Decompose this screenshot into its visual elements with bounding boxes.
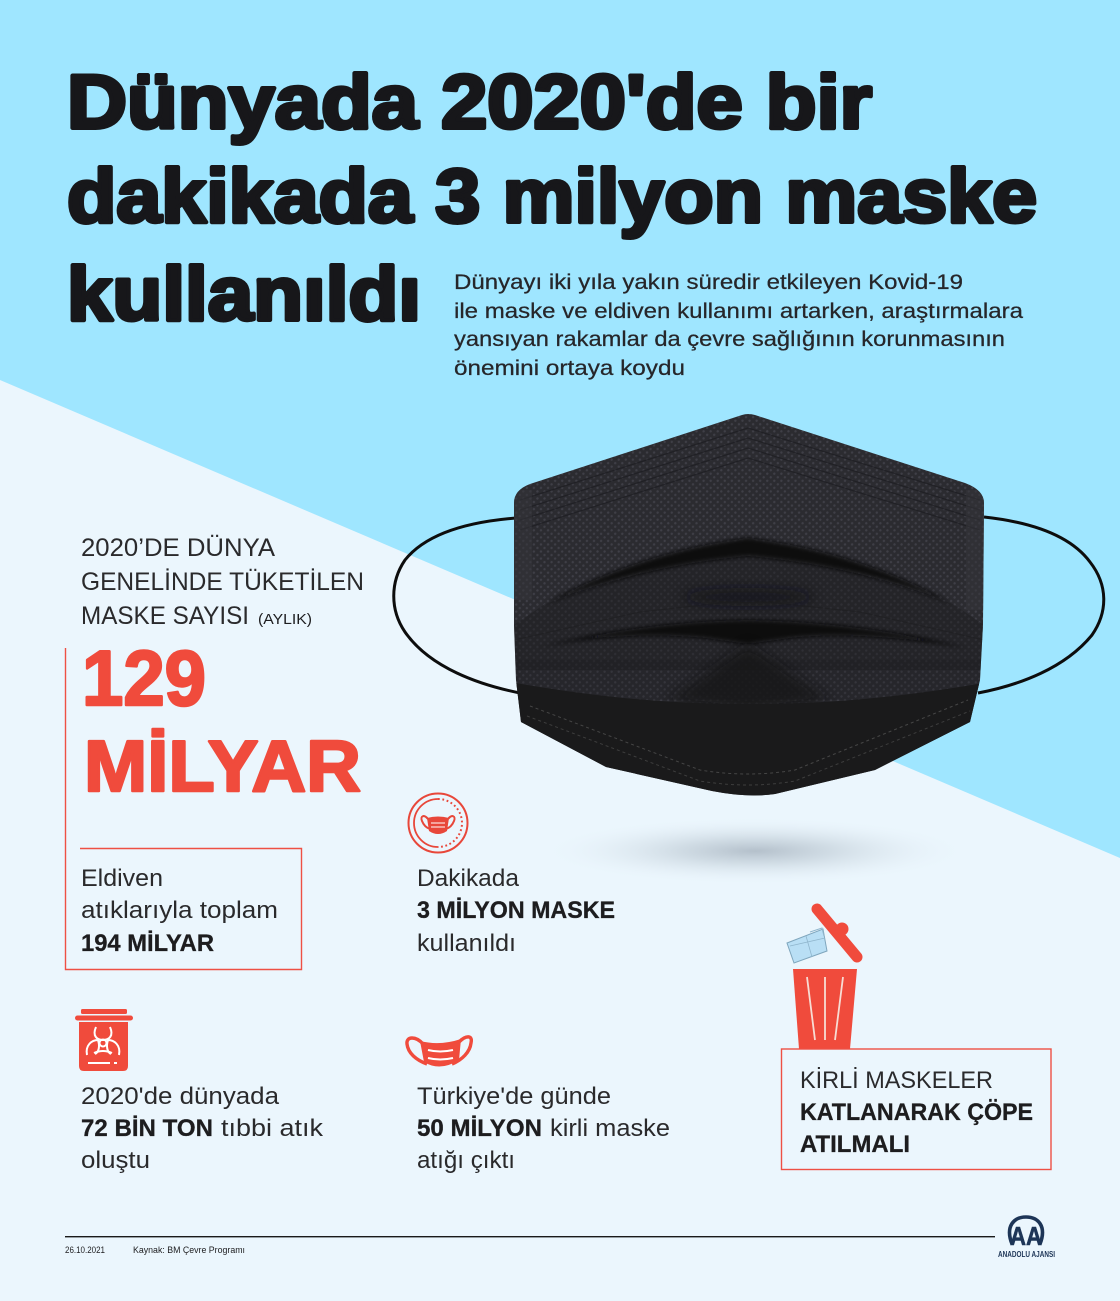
lower dark center xyxy=(670,646,828,704)
lower pleat shade xyxy=(514,660,984,700)
text: Turkey daily: Türkiye'de günde xyxy=(417,1083,611,1110)
text: medical waste xyxy=(81,1083,324,1174)
heading: monthly masks: GENELİNDE TÜKETİLEN xyxy=(81,567,364,596)
icon: trash can with mask xyxy=(787,909,857,1049)
top pleat ridges xyxy=(520,428,980,530)
illustration: black face mask xyxy=(394,414,1104,800)
intro text xyxy=(454,271,1023,380)
footer rule xyxy=(65,1236,995,1237)
heading: monthly masks: (AYLIK) xyxy=(258,612,312,628)
callout: fold dirty masks: KİRLİ MASKELER xyxy=(800,1067,993,1094)
logo: Anadolu Ajansi: ANADOLU AJANSI xyxy=(998,1249,1055,1259)
intro text: yansıyan rakamlar da çevre sağlığının korunmasının xyxy=(454,328,1005,351)
mask body xyxy=(514,414,984,795)
text: gloves total: 194 MİLYAR xyxy=(81,930,214,957)
red bracket frame xyxy=(66,648,302,970)
heading: monthly masks: MASKE SAYISI xyxy=(81,602,249,630)
icon: mask in circle xyxy=(408,794,468,852)
title: Dünyada 2020'de bir xyxy=(67,60,872,145)
big number: MİLYAR xyxy=(84,727,361,807)
intro text: önemini ortaya koydu xyxy=(454,357,685,380)
heading: monthly masks: 2020’DE DÜNYA xyxy=(81,534,275,562)
text: Turkey daily: kirli maske xyxy=(550,1115,670,1142)
text: per minute: kullanıldı xyxy=(417,930,516,957)
flap shadow xyxy=(545,538,953,604)
text: Turkey daily: 50 MİLYON xyxy=(417,1115,542,1142)
ear loop right xyxy=(978,517,1104,693)
shaded middle pleat xyxy=(514,558,983,670)
title: dakikada 3 milyon maske xyxy=(67,154,1037,239)
big number: 129 xyxy=(82,634,206,722)
text: medical waste: 2020'de dünyada xyxy=(81,1083,279,1110)
callout: fold dirty masks xyxy=(782,1049,1051,1170)
ear loop left xyxy=(394,518,520,693)
bottom solid band xyxy=(510,682,990,800)
heading: monthly masks xyxy=(81,534,364,630)
logo: Anadolu Ajansi: AA xyxy=(1010,1221,1042,1251)
text: gloves total xyxy=(81,865,278,957)
background: blue diagonal panel xyxy=(0,0,1120,858)
text: per minute: Dakikada xyxy=(417,865,519,892)
title xyxy=(67,60,1037,337)
footer: date: 26.10.2021 xyxy=(65,1245,105,1255)
icon: red mask xyxy=(407,1037,471,1067)
big number xyxy=(82,634,361,807)
text: Turkey daily xyxy=(417,1083,670,1174)
mask shadow xyxy=(540,817,970,885)
text: per minute: 3 MİLYON MASKE xyxy=(417,897,615,924)
text: medical waste: oluştu xyxy=(81,1147,150,1174)
text: gloves total: atıklarıyla toplam xyxy=(81,897,278,924)
logo: Anadolu Ajansi xyxy=(998,1217,1055,1259)
icon: biohazard bin xyxy=(75,1009,133,1071)
ridges above second fold xyxy=(514,605,982,640)
text: medical waste: tıbbi atık xyxy=(221,1115,324,1142)
title: kullanıldı xyxy=(67,252,421,337)
intro text: ile maske ve eldiven kullanımı artarken, araştırmalara xyxy=(454,300,1023,323)
text: gloves total: Eldiven xyxy=(81,865,163,892)
text: per minute xyxy=(417,865,615,957)
second fold xyxy=(561,618,952,645)
intro text: Dünyayı iki yıla yakın süredir etkileyen Kovid-19 xyxy=(454,271,963,294)
footer: source: Kaynak: BM Çevre Programı xyxy=(133,1245,245,1255)
text: Turkey daily: atığı çıktı xyxy=(417,1147,515,1174)
callout: fold dirty masks: ATILMALI xyxy=(800,1131,910,1158)
stitching xyxy=(530,700,968,774)
callout: fold dirty masks: KATLANARAK ÇÖPE xyxy=(800,1099,1033,1126)
side seams xyxy=(514,490,984,610)
text: medical waste: 72 BİN TON xyxy=(81,1115,213,1142)
